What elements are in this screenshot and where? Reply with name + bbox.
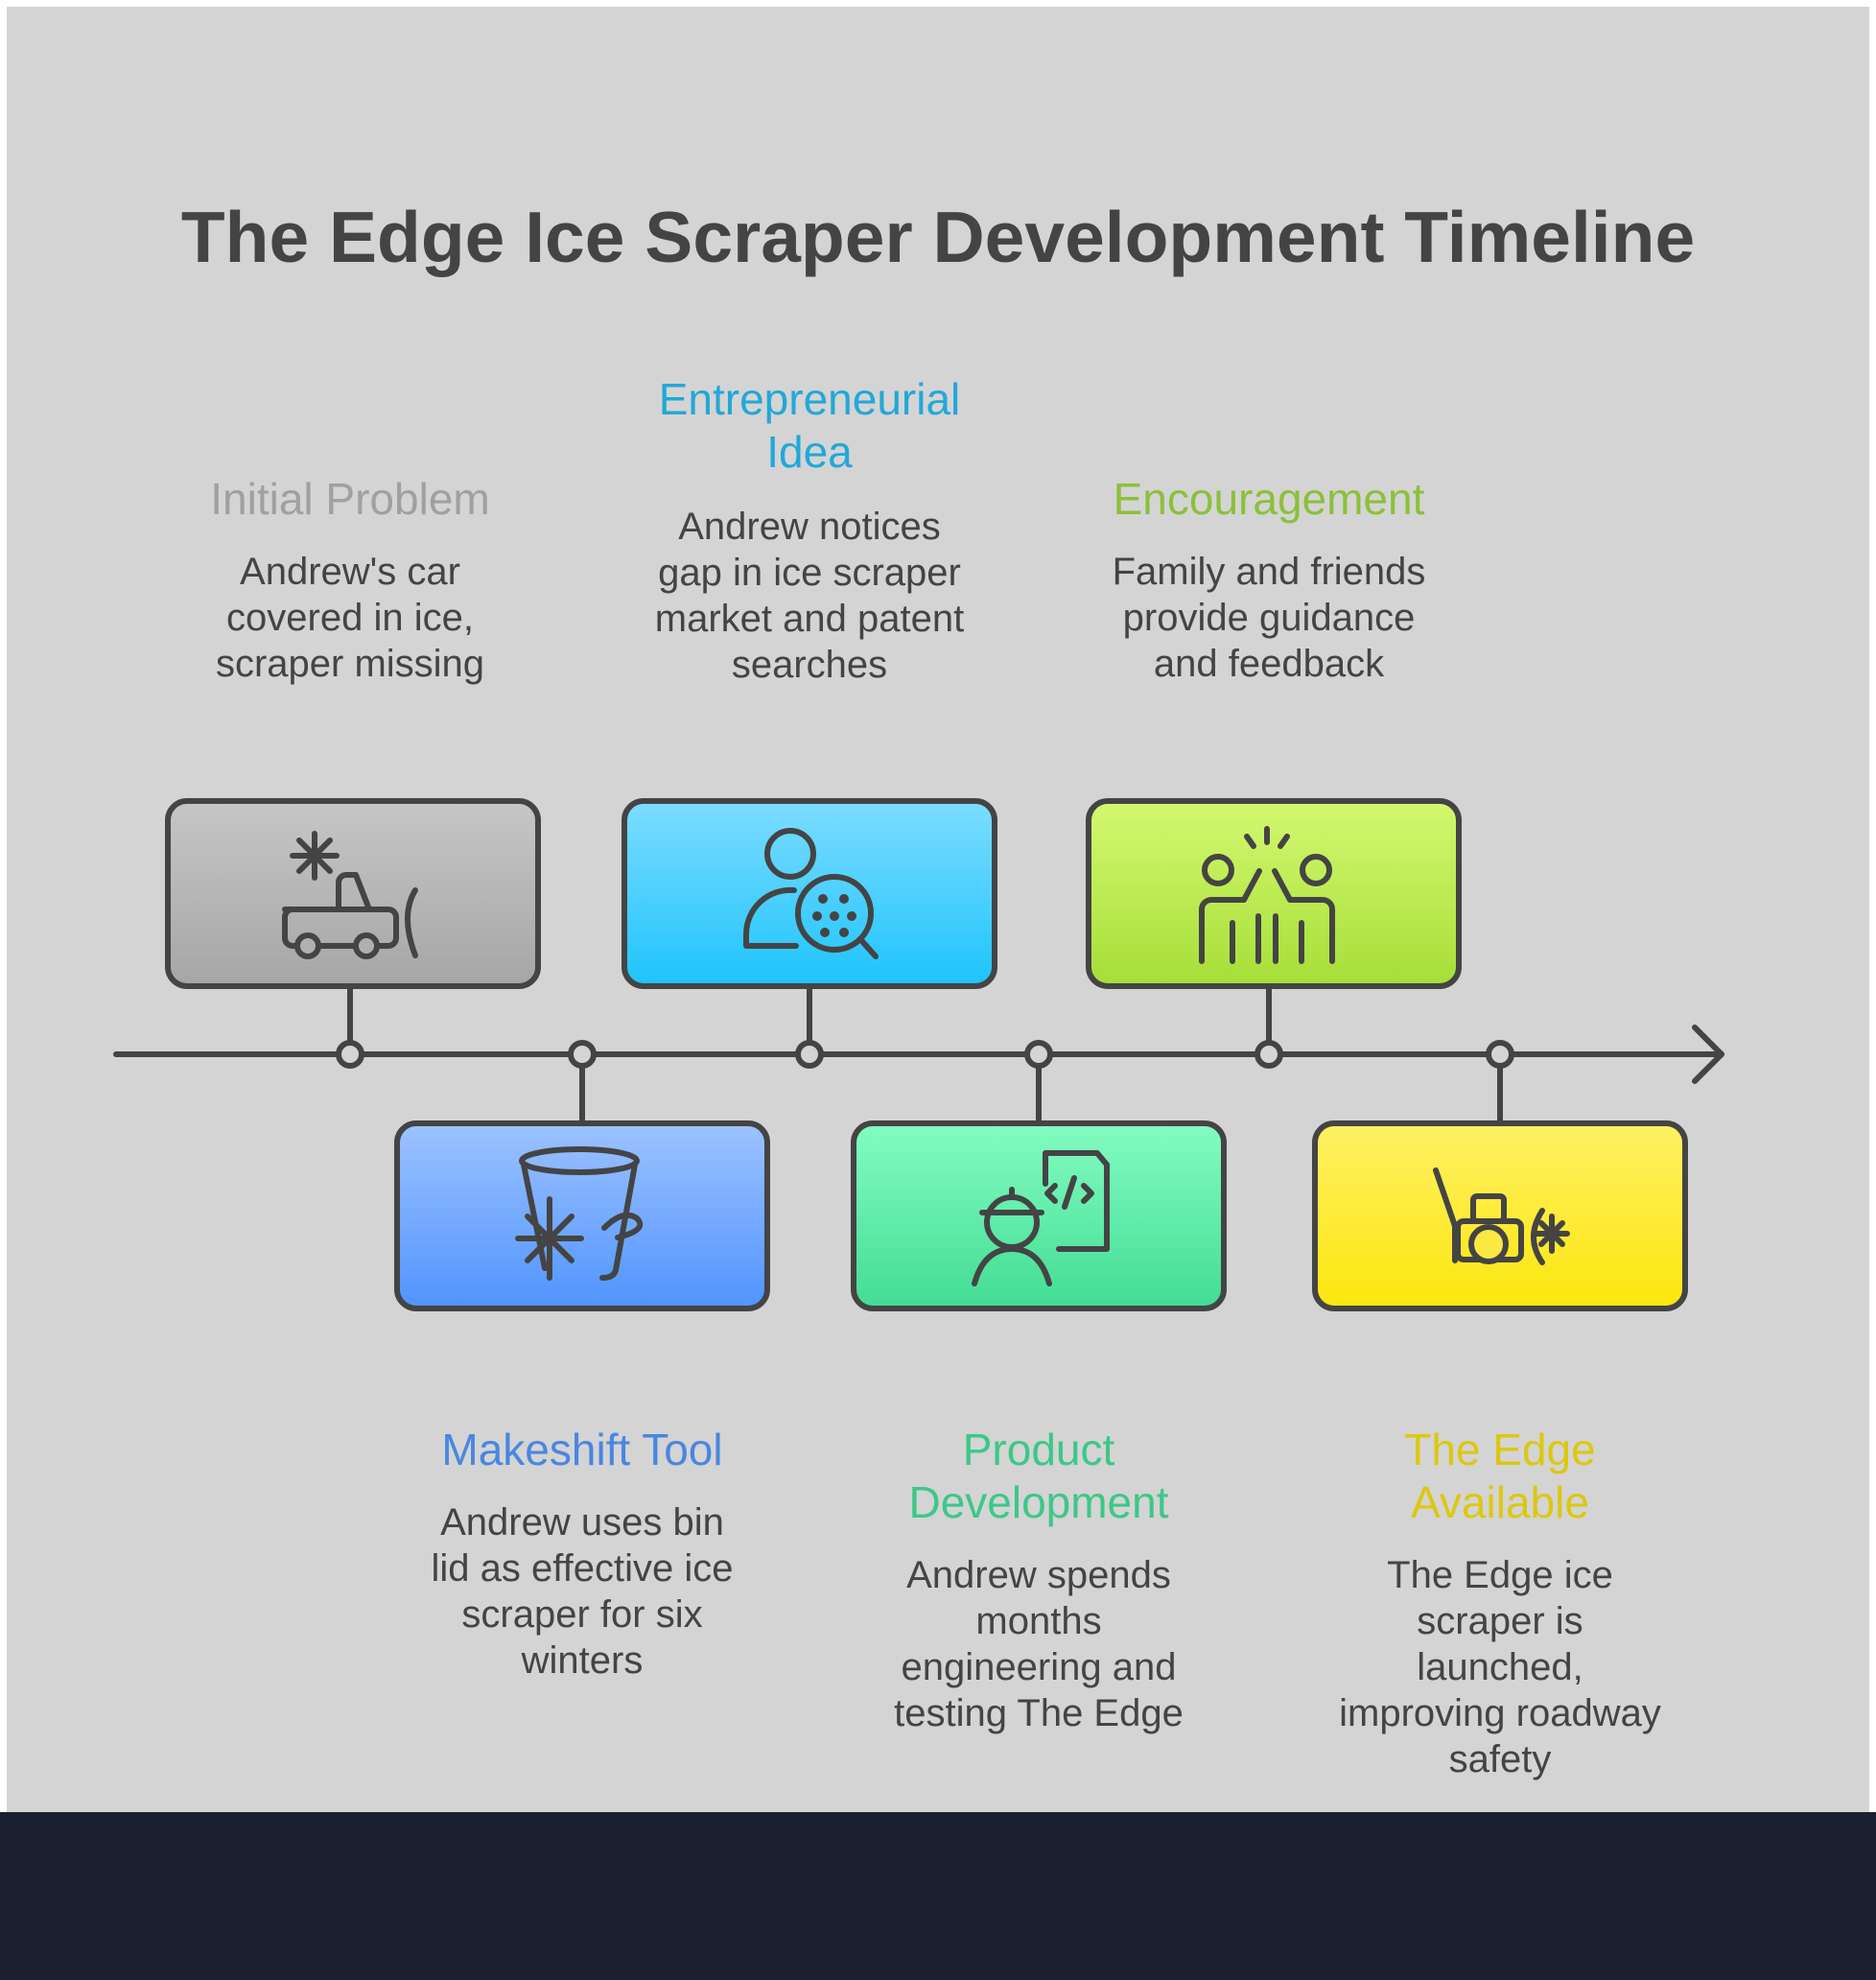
text: entrepreneurial idea: Idea [766, 427, 853, 477]
text: makeshift tool: Andrew uses bin [440, 1501, 724, 1544]
text: product development: engineering and [902, 1646, 1176, 1688]
box: the edge available [1315, 1123, 1685, 1308]
text: encouragement: Encouragement [1114, 474, 1424, 524]
text: the edge available: launched, [1417, 1646, 1583, 1688]
icon: car with snow [285, 834, 415, 956]
text: the edge available: improving roadway [1339, 1692, 1661, 1734]
box: product development [854, 1123, 1224, 1308]
text: the edge available: Available [1411, 1477, 1589, 1527]
text: product development: testing The Edge [894, 1692, 1184, 1734]
text: product development: Andrew spends [906, 1554, 1171, 1596]
text: makeshift tool: lid as effective ice [432, 1547, 733, 1590]
text: makeshift tool: winters [522, 1639, 643, 1682]
text: encouragement: provide guidance [1123, 597, 1415, 639]
text: makeshift tool [432, 1425, 733, 1682]
connectors [350, 987, 1500, 1122]
timeline axis [116, 1027, 1722, 1081]
text: product development: months [975, 1600, 1102, 1642]
text: initial problem: scraper missing [216, 643, 484, 685]
text: encouragement [1113, 474, 1425, 685]
icon: snow blower [1436, 1170, 1567, 1262]
text: initial problem: Andrew's car [240, 551, 460, 593]
text: encouragement: Family and friends [1113, 551, 1425, 593]
text: entrepreneurial idea [655, 374, 964, 686]
icon: high five [1202, 829, 1332, 961]
icon: bin lid and snowflake [518, 1149, 640, 1278]
icon: person with magnifier [746, 831, 876, 956]
icon: engineer with code [974, 1153, 1107, 1284]
box: encouragement [1089, 801, 1459, 986]
text: product development: Development [908, 1477, 1169, 1527]
box: makeshift tool [397, 1123, 767, 1308]
text: product development: Product [963, 1425, 1114, 1474]
title: The Edge Ice Scraper Development Timeline [181, 197, 1695, 277]
text: entrepreneurial idea: gap in ice scraper [658, 552, 961, 594]
text: initial problem: covered in ice, [226, 597, 474, 639]
text: product development [894, 1425, 1184, 1734]
text: the edge available: safety [1449, 1738, 1551, 1780]
text: makeshift tool: Makeshift Tool [441, 1425, 723, 1474]
text: entrepreneurial idea: Entrepreneurial [659, 374, 960, 424]
nodes [339, 1043, 1512, 1066]
text: initial problem: Initial Problem [210, 474, 490, 524]
text: makeshift tool: scraper for six [461, 1593, 703, 1636]
text: the edge available: The Edge [1404, 1425, 1596, 1474]
text: entrepreneurial idea: market and patent [655, 598, 964, 640]
text: the edge available: scraper is [1417, 1600, 1583, 1642]
text: entrepreneurial idea: searches [732, 644, 887, 686]
text: initial problem [210, 474, 490, 685]
text: the edge available [1339, 1425, 1661, 1780]
box: initial problem [168, 801, 538, 986]
text: entrepreneurial idea: Andrew notices [678, 506, 941, 548]
text: encouragement: and feedback [1154, 643, 1384, 685]
text: the edge available: The Edge ice [1387, 1554, 1613, 1596]
box: entrepreneurial idea [624, 801, 995, 986]
